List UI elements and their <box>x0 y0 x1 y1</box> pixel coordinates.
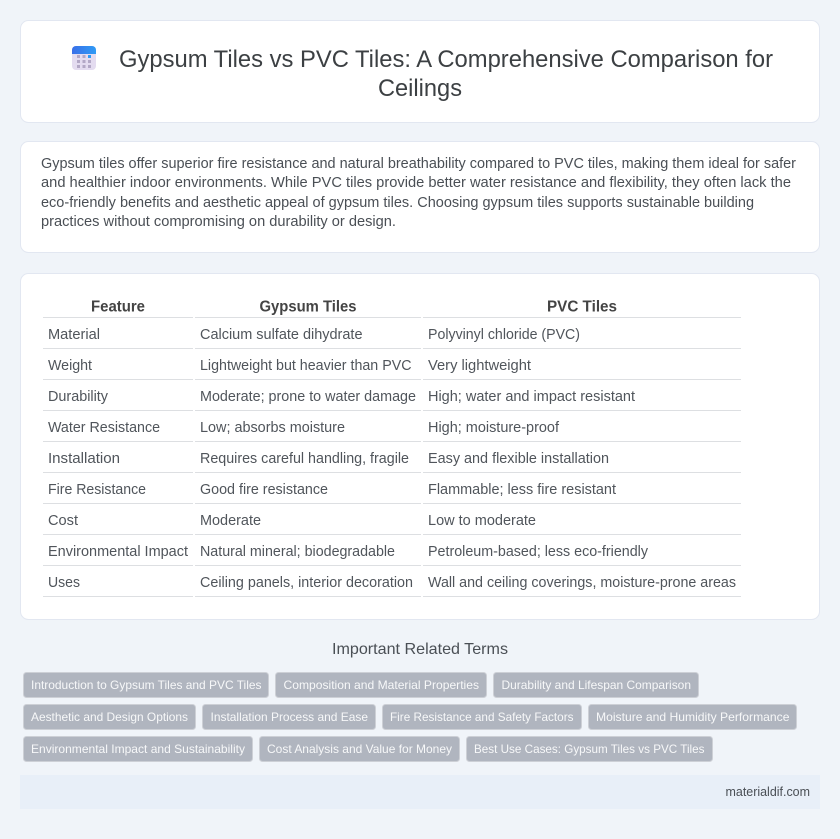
row: environmental impact: Environmental Impact <box>48 544 188 560</box>
row: material <box>43 327 741 349</box>
row: material: Calcium sulfate dihydrate <box>200 327 362 343</box>
table header <box>43 298 741 318</box>
row: water resistance: Water Resistance <box>48 420 160 436</box>
related terms tags <box>24 672 796 762</box>
row: water resistance: Low; absorbs moisture <box>200 420 345 436</box>
row: weight: Weight <box>48 358 92 374</box>
footer source: materialdif.com <box>726 785 810 799</box>
row: cost: Cost <box>48 513 78 529</box>
title <box>119 46 773 102</box>
row: weight: Very lightweight <box>428 358 531 374</box>
tag <box>260 736 460 762</box>
row: cost <box>43 513 741 535</box>
row: installation: Requires careful handling, fragile <box>200 451 409 467</box>
title: Ceilings <box>378 75 462 102</box>
summary text: practices without compromising on durability or design. <box>41 214 396 230</box>
row: fire resistance <box>43 482 741 504</box>
row: durability: Moderate; prone to water damage <box>200 389 416 405</box>
table header: PVC Tiles <box>547 298 617 316</box>
row: fire resistance: Good fire resistance <box>200 482 328 498</box>
title: Gypsum Tiles vs PVC Tiles: A Comprehensive Comparison for <box>119 46 773 73</box>
panel: header <box>20 20 820 122</box>
row: installation <box>43 451 741 473</box>
row: cost: Moderate <box>200 513 261 529</box>
tag <box>494 672 698 698</box>
tag <box>202 704 376 730</box>
row: durability: Durability <box>48 389 109 405</box>
tag: Installation Process and Ease <box>210 710 368 724</box>
tag <box>382 704 582 730</box>
row: environmental impact: Petroleum-based; less eco-friendly <box>428 544 649 560</box>
panel: comparison table <box>20 274 820 620</box>
summary text: eco-friendly benefits and aesthetic appeal of gypsum tiles. Choosing gypsum tiles supports sustainable building <box>41 195 754 211</box>
tag: Composition and Material Properties <box>284 678 479 692</box>
tag: Best Use Cases: Gypsum Tiles vs PVC Tiles <box>474 742 704 756</box>
row: environmental impact <box>43 544 741 566</box>
row: material: Material <box>48 327 100 343</box>
tag <box>588 704 796 730</box>
row: weight: Lightweight but heavier than PVC <box>200 358 412 374</box>
row: weight <box>43 358 741 380</box>
tag: Aesthetic and Design Options <box>31 710 188 724</box>
tag: Fire Resistance and Safety Factors <box>390 710 574 724</box>
row: environmental impact: Natural mineral; biodegradable <box>200 544 395 560</box>
tag: Durability and Lifespan Comparison <box>502 678 691 692</box>
summary text: Gypsum tiles offer superior fire resistance and natural breathability compared to PVC tiles, making them ideal for safer <box>41 156 796 172</box>
row: installation: Installation <box>48 451 120 467</box>
row: fire resistance: Flammable; less fire resistant <box>428 482 616 498</box>
tag <box>466 736 712 762</box>
row: fire resistance: Fire Resistance <box>48 482 146 498</box>
footer <box>20 775 820 809</box>
row: material: Polyvinyl chloride (PVC) <box>428 327 580 343</box>
tag: Moisture and Humidity Performance <box>596 710 790 724</box>
panel: summary <box>20 142 820 252</box>
table header: Feature <box>91 298 145 316</box>
summary text <box>41 156 796 230</box>
row: uses: Ceiling panels, interior decoration <box>200 575 413 591</box>
row: uses: Wall and ceiling coverings, moisture-prone areas <box>428 575 736 591</box>
row: water resistance: High; moisture-proof <box>428 420 560 436</box>
tag <box>24 736 252 762</box>
tag: Introduction to Gypsum Tiles and PVC Tiles <box>31 678 262 692</box>
tag: Cost Analysis and Value for Money <box>267 742 452 756</box>
tag: Environmental Impact and Sustainability <box>31 742 245 756</box>
row: durability: High; water and impact resistant <box>428 389 635 405</box>
row: uses: Uses <box>48 575 80 591</box>
row: water resistance <box>43 420 741 442</box>
summary text: and healthier indoor environments. While PVC tiles provide better water resistance and flexibility, they often lack the <box>41 175 791 191</box>
tag <box>24 672 268 698</box>
row: installation: Easy and flexible installation <box>428 451 609 467</box>
row: durability <box>43 389 741 411</box>
table header: Gypsum Tiles <box>260 298 357 316</box>
row: cost: Low to moderate <box>428 513 536 529</box>
heading: related terms: Important Related Terms <box>332 641 508 658</box>
icon: calendar <box>72 46 96 70</box>
row: uses <box>43 575 741 597</box>
tag <box>276 672 486 698</box>
tag <box>24 704 196 730</box>
